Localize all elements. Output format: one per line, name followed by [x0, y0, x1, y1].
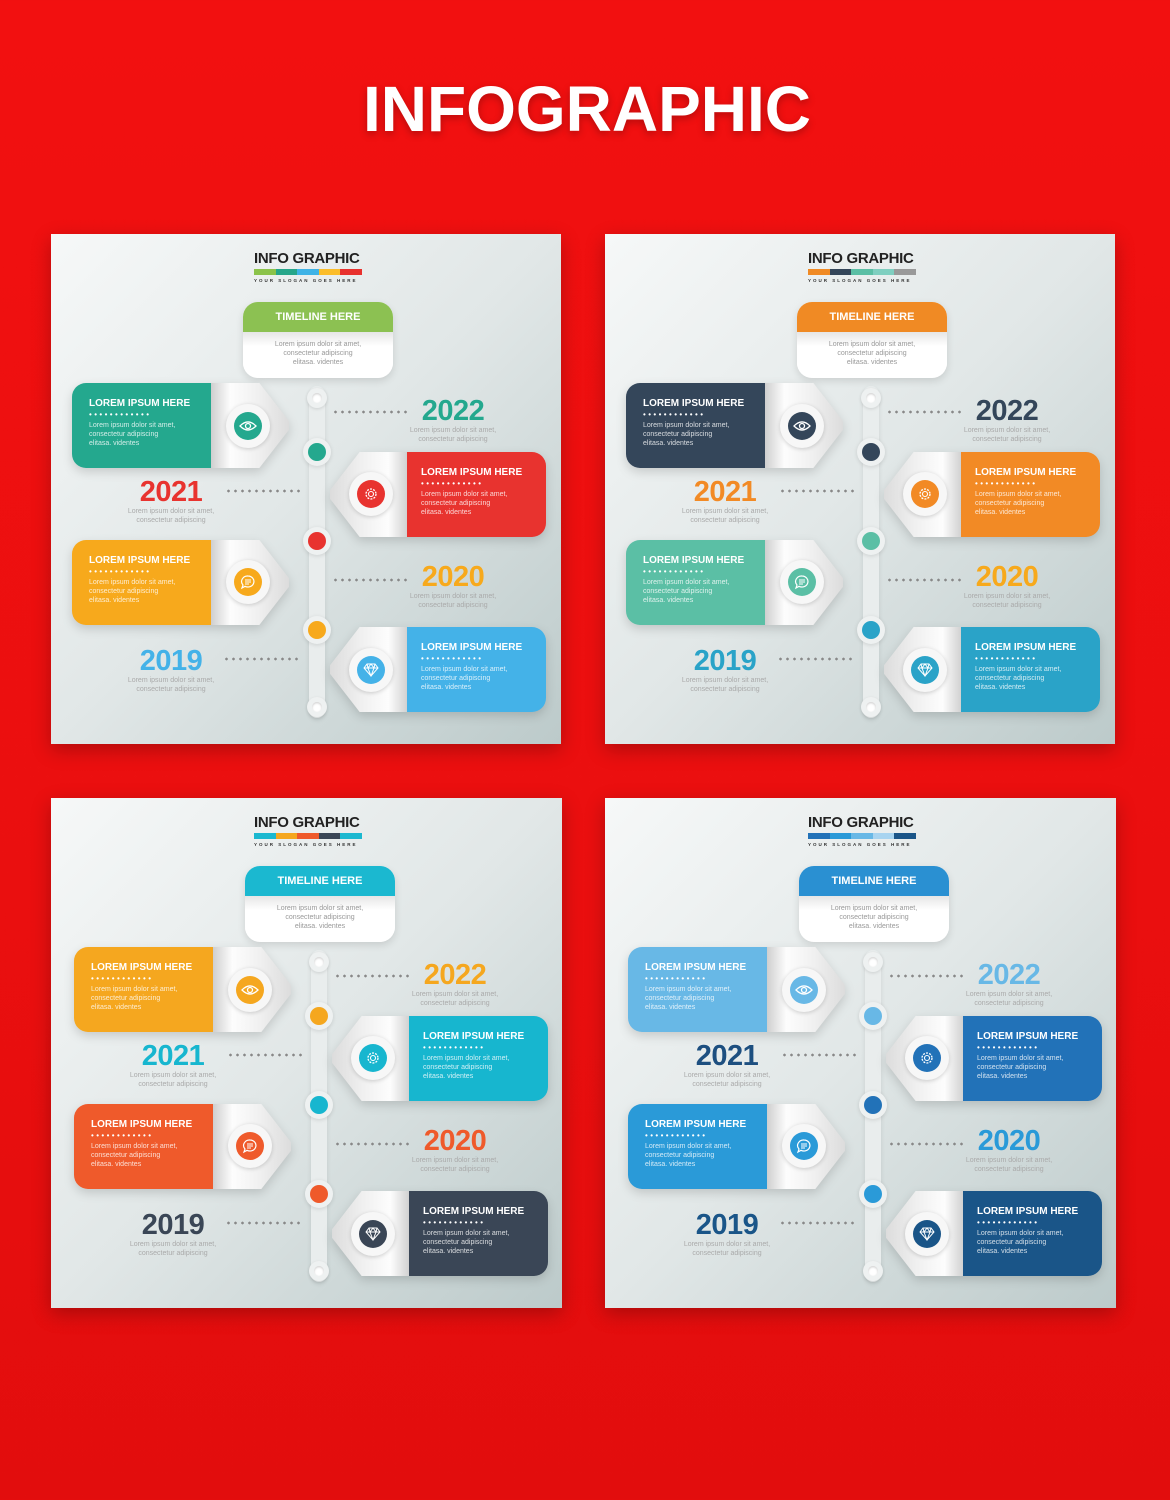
header logo: YOUR SLOGAN GOES HERE	[254, 278, 358, 283]
year 2022: consectetur adipiscing	[974, 1000, 1044, 1007]
card left 1	[70, 947, 294, 1040]
year 2022: consectetur adipiscing	[418, 436, 488, 443]
year 2022: Lorem ipsum dolor sit amet,	[964, 427, 1050, 434]
year 2020: consectetur adipiscing	[418, 602, 488, 609]
node 2	[859, 1091, 887, 1119]
card right 2: LOREM IPSUM HERE	[975, 642, 1076, 653]
year 2021: Lorem ipsum dolor sit amet,	[130, 1072, 216, 1079]
year 2020: consectetur adipiscing	[972, 602, 1042, 609]
node 1	[305, 1002, 333, 1030]
card right 2	[882, 627, 1104, 720]
card left 1: Lorem ipsum dolor sit amet,	[645, 986, 731, 993]
node top	[861, 388, 881, 408]
card left 2: LOREM IPSUM HERE	[89, 555, 190, 566]
dotted connector	[779, 489, 855, 493]
timeline box: TIMELINE HERE	[276, 311, 360, 323]
year 2020: consectetur adipiscing	[974, 1166, 1044, 1173]
card left 1	[624, 947, 848, 1040]
year 2021: consectetur adipiscing	[138, 1081, 208, 1088]
year 2021	[130, 1040, 216, 1088]
year 2020: 2020	[422, 561, 484, 593]
card left 2: consectetur adipiscing	[89, 588, 158, 595]
year 2021: 2021	[142, 1040, 204, 1072]
node 3	[859, 1180, 887, 1208]
card right 1: elitasa. videntes	[421, 509, 471, 516]
year 2019: Lorem ipsum dolor sit amet,	[130, 1241, 216, 1248]
card left 1: consectetur adipiscing	[643, 431, 712, 438]
timeline box: TIMELINE HERE	[278, 875, 362, 887]
card left 1: elitasa. videntes	[645, 1004, 695, 1011]
panel: timeline 1 green	[51, 234, 561, 744]
card left 1: Lorem ipsum dolor sit amet,	[89, 422, 175, 429]
card right 1: elitasa. videntes	[977, 1073, 1027, 1080]
node top	[307, 388, 327, 408]
card right 2: ••••••••••••	[977, 1218, 1039, 1227]
year 2020	[412, 1125, 498, 1173]
card left 2: LOREM IPSUM HERE	[91, 1119, 192, 1130]
node 3	[303, 616, 331, 644]
card left 2: Lorem ipsum dolor sit amet,	[645, 1143, 731, 1150]
node bottom	[863, 1261, 883, 1281]
node 3	[857, 616, 885, 644]
timeline box: elitasa. videntes	[849, 923, 899, 930]
icon gear	[905, 1036, 949, 1080]
dotted connector	[888, 1142, 964, 1146]
year 2019: consectetur adipiscing	[138, 1250, 208, 1257]
timeline box	[799, 866, 949, 942]
timeline box: Lorem ipsum dolor sit amet,	[829, 341, 915, 348]
timeline box: elitasa. videntes	[295, 923, 345, 930]
card left 2: ••••••••••••	[645, 1131, 707, 1140]
year 2019: 2019	[694, 645, 756, 677]
year 2019: consectetur adipiscing	[690, 686, 760, 693]
icon eye	[780, 404, 824, 448]
year 2019	[130, 1209, 216, 1257]
card right 1: elitasa. videntes	[975, 509, 1025, 516]
header logo: YOUR SLOGAN GOES HERE	[808, 842, 912, 847]
dotted connector	[332, 410, 408, 414]
card right 1	[882, 452, 1104, 544]
card left 1: LOREM IPSUM HERE	[91, 962, 192, 973]
icon gear	[349, 472, 393, 516]
year 2019: consectetur adipiscing	[692, 1250, 762, 1257]
card left 1	[622, 383, 846, 476]
year 2019: consectetur adipiscing	[136, 686, 206, 693]
card left 1: ••••••••••••	[645, 974, 707, 983]
icon diamond	[905, 1212, 949, 1256]
card left 2	[70, 1104, 294, 1196]
card right 2: LOREM IPSUM HERE	[421, 642, 522, 653]
card left 1	[68, 383, 292, 476]
icon gear	[351, 1036, 395, 1080]
year 2021: Lorem ipsum dolor sit amet,	[682, 508, 768, 515]
header logo: INFO GRAPHIC	[254, 814, 360, 831]
year 2021: consectetur adipiscing	[692, 1081, 762, 1088]
year 2021: 2021	[140, 476, 202, 508]
timeline box: consectetur adipiscing	[837, 350, 907, 357]
node 2	[857, 527, 885, 555]
card right 1: elitasa. videntes	[423, 1073, 473, 1080]
year 2020: 2020	[978, 1125, 1040, 1157]
dotted connector	[779, 1221, 855, 1225]
card left 2: LOREM IPSUM HERE	[643, 555, 744, 566]
year 2020: Lorem ipsum dolor sit amet,	[966, 1157, 1052, 1164]
year 2021	[682, 476, 768, 524]
card left 2: elitasa. videntes	[91, 1161, 141, 1168]
card right 2: consectetur adipiscing	[975, 675, 1044, 682]
card right 2: Lorem ipsum dolor sit amet,	[975, 666, 1061, 673]
icon gear	[903, 472, 947, 516]
timeline box: consectetur adipiscing	[839, 914, 909, 921]
card left 2: Lorem ipsum dolor sit amet,	[91, 1143, 177, 1150]
card left 2: elitasa. videntes	[645, 1161, 695, 1168]
card right 1: consectetur adipiscing	[975, 500, 1044, 507]
year 2020	[966, 1125, 1052, 1173]
card left 2: consectetur adipiscing	[643, 588, 712, 595]
card left 2	[68, 540, 292, 632]
year 2019	[682, 645, 768, 693]
card right 1: ••••••••••••	[975, 479, 1037, 488]
dotted connector	[332, 578, 408, 582]
dotted connector	[886, 578, 962, 582]
year 2020	[964, 561, 1050, 609]
header logo: INFO GRAPHIC	[808, 814, 914, 831]
card left 1: elitasa. videntes	[89, 440, 139, 447]
card left 1: consectetur adipiscing	[645, 995, 714, 1002]
card right 2	[328, 627, 550, 720]
year 2019	[684, 1209, 770, 1257]
card right 1: LOREM IPSUM HERE	[421, 467, 522, 478]
card left 1: LOREM IPSUM HERE	[643, 398, 744, 409]
year 2020: Lorem ipsum dolor sit amet,	[964, 593, 1050, 600]
year 2019: Lorem ipsum dolor sit amet,	[684, 1241, 770, 1248]
card right 2: Lorem ipsum dolor sit amet,	[421, 666, 507, 673]
icon chat	[782, 1124, 826, 1168]
node 1	[303, 438, 331, 466]
title: INFOGRAPHIC	[363, 73, 811, 145]
card right 2: elitasa. videntes	[975, 684, 1025, 691]
year 2022	[412, 959, 498, 1007]
dotted connector	[227, 1053, 303, 1057]
card right 2: elitasa. videntes	[977, 1248, 1027, 1255]
node bottom	[307, 697, 327, 717]
card left 1: elitasa. videntes	[91, 1004, 141, 1011]
year 2020: consectetur adipiscing	[420, 1166, 490, 1173]
dotted connector	[223, 657, 299, 661]
year 2022: 2022	[978, 959, 1040, 991]
card left 1: ••••••••••••	[91, 974, 153, 983]
card right 2: Lorem ipsum dolor sit amet,	[423, 1230, 509, 1237]
card left 2: elitasa. videntes	[643, 597, 693, 604]
year 2021: Lorem ipsum dolor sit amet,	[128, 508, 214, 515]
card right 2: Lorem ipsum dolor sit amet,	[977, 1230, 1063, 1237]
icon chat	[780, 560, 824, 604]
node bottom	[309, 1261, 329, 1281]
dotted connector	[781, 1053, 857, 1057]
card left 2: Lorem ipsum dolor sit amet,	[89, 579, 175, 586]
icon diamond	[903, 648, 947, 692]
year 2021: Lorem ipsum dolor sit amet,	[684, 1072, 770, 1079]
card right 1	[884, 1016, 1106, 1108]
year 2022: 2022	[422, 395, 484, 427]
node top	[309, 952, 329, 972]
year 2022	[966, 959, 1052, 1007]
header logo	[808, 250, 916, 283]
panel: timeline 4 blue	[605, 798, 1116, 1308]
year 2020: Lorem ipsum dolor sit amet,	[412, 1157, 498, 1164]
timeline box: elitasa. videntes	[847, 359, 897, 366]
year 2021	[684, 1040, 770, 1088]
header logo: YOUR SLOGAN GOES HERE	[808, 278, 912, 283]
card right 1	[330, 1016, 552, 1108]
year 2022	[410, 395, 496, 443]
card left 2: LOREM IPSUM HERE	[645, 1119, 746, 1130]
node 1	[859, 1002, 887, 1030]
node bottom	[861, 697, 881, 717]
header logo: YOUR SLOGAN GOES HERE	[254, 842, 358, 847]
year 2022: 2022	[424, 959, 486, 991]
spine	[863, 386, 879, 718]
card right 2: ••••••••••••	[423, 1218, 485, 1227]
timeline box: TIMELINE HERE	[832, 875, 916, 887]
timeline box	[797, 302, 947, 378]
panel: timeline 3 cyan	[51, 798, 562, 1308]
card left 1: LOREM IPSUM HERE	[89, 398, 190, 409]
card left 2	[622, 540, 846, 632]
card right 1	[328, 452, 550, 544]
dotted connector	[886, 410, 962, 414]
card right 1: Lorem ipsum dolor sit amet,	[977, 1055, 1063, 1062]
card right 2: consectetur adipiscing	[423, 1239, 492, 1246]
timeline box: elitasa. videntes	[293, 359, 343, 366]
year 2019: Lorem ipsum dolor sit amet,	[682, 677, 768, 684]
card left 2: elitasa. videntes	[89, 597, 139, 604]
year 2021: 2021	[696, 1040, 758, 1072]
year 2021: consectetur adipiscing	[690, 517, 760, 524]
card right 2	[330, 1191, 552, 1284]
panel: timeline 2 orange	[605, 234, 1115, 744]
card right 1: Lorem ipsum dolor sit amet,	[421, 491, 507, 498]
header logo: INFO GRAPHIC	[254, 250, 360, 267]
card right 1: consectetur adipiscing	[977, 1064, 1046, 1071]
node 2	[305, 1091, 333, 1119]
card right 2: LOREM IPSUM HERE	[423, 1206, 524, 1217]
card left 2: consectetur adipiscing	[645, 1152, 714, 1159]
icon eye	[782, 968, 826, 1012]
year 2022: Lorem ipsum dolor sit amet,	[966, 991, 1052, 998]
node 3	[305, 1180, 333, 1208]
card right 1: LOREM IPSUM HERE	[423, 1031, 524, 1042]
timeline box: Lorem ipsum dolor sit amet,	[275, 341, 361, 348]
year 2019	[128, 645, 214, 693]
timeline box	[245, 866, 395, 942]
year 2020	[410, 561, 496, 609]
icon chat	[228, 1124, 272, 1168]
card right 1: LOREM IPSUM HERE	[977, 1031, 1078, 1042]
dotted connector	[225, 489, 301, 493]
card right 2	[884, 1191, 1106, 1284]
card left 2: ••••••••••••	[91, 1131, 153, 1140]
card right 1: LOREM IPSUM HERE	[975, 467, 1076, 478]
header logo	[254, 814, 362, 847]
card right 1: Lorem ipsum dolor sit amet,	[423, 1055, 509, 1062]
node 2	[303, 527, 331, 555]
card left 2: consectetur adipiscing	[91, 1152, 160, 1159]
card right 1: consectetur adipiscing	[423, 1064, 492, 1071]
year 2022: consectetur adipiscing	[972, 436, 1042, 443]
header logo	[808, 814, 916, 847]
year 2021	[128, 476, 214, 524]
card left 1: consectetur adipiscing	[91, 995, 160, 1002]
card right 2: elitasa. videntes	[423, 1248, 473, 1255]
card left 2	[624, 1104, 848, 1196]
card right 1: ••••••••••••	[977, 1043, 1039, 1052]
header logo	[254, 250, 362, 283]
card right 1: Lorem ipsum dolor sit amet,	[975, 491, 1061, 498]
card right 1: ••••••••••••	[423, 1043, 485, 1052]
year 2019: Lorem ipsum dolor sit amet,	[128, 677, 214, 684]
year 2022: 2022	[976, 395, 1038, 427]
node 1	[857, 438, 885, 466]
header logo: INFO GRAPHIC	[808, 250, 914, 267]
year 2022: consectetur adipiscing	[420, 1000, 490, 1007]
card right 2: elitasa. videntes	[421, 684, 471, 691]
card right 2: consectetur adipiscing	[977, 1239, 1046, 1246]
year 2019: 2019	[142, 1209, 204, 1241]
year 2020: 2020	[424, 1125, 486, 1157]
timeline box: consectetur adipiscing	[285, 914, 355, 921]
year 2020: 2020	[976, 561, 1038, 593]
card right 2: ••••••••••••	[975, 654, 1037, 663]
dotted connector	[888, 974, 964, 978]
spine	[311, 950, 327, 1282]
card left 1: elitasa. videntes	[643, 440, 693, 447]
icon diamond	[351, 1212, 395, 1256]
icon eye	[228, 968, 272, 1012]
timeline box: consectetur adipiscing	[283, 350, 353, 357]
year 2022: Lorem ipsum dolor sit amet,	[412, 991, 498, 998]
year 2021: 2021	[694, 476, 756, 508]
timeline box: Lorem ipsum dolor sit amet,	[831, 905, 917, 912]
card right 2: LOREM IPSUM HERE	[977, 1206, 1078, 1217]
card left 2: Lorem ipsum dolor sit amet,	[643, 579, 729, 586]
dotted connector	[334, 1142, 410, 1146]
card right 2: consectetur adipiscing	[421, 675, 490, 682]
year 2021: consectetur adipiscing	[136, 517, 206, 524]
card left 1: ••••••••••••	[89, 410, 151, 419]
icon eye	[226, 404, 270, 448]
card left 1: consectetur adipiscing	[89, 431, 158, 438]
timeline box: Lorem ipsum dolor sit amet,	[277, 905, 363, 912]
spine	[309, 386, 325, 718]
card left 1: Lorem ipsum dolor sit amet,	[643, 422, 729, 429]
card right 2: ••••••••••••	[421, 654, 483, 663]
year 2022	[964, 395, 1050, 443]
dotted connector	[225, 1221, 301, 1225]
dotted connector	[777, 657, 853, 661]
card right 1: ••••••••••••	[421, 479, 483, 488]
spine	[865, 950, 881, 1282]
card left 1: Lorem ipsum dolor sit amet,	[91, 986, 177, 993]
node top	[863, 952, 883, 972]
card left 1: LOREM IPSUM HERE	[645, 962, 746, 973]
timeline box: TIMELINE HERE	[830, 311, 914, 323]
year 2019: 2019	[140, 645, 202, 677]
year 2022: Lorem ipsum dolor sit amet,	[410, 427, 496, 434]
icon diamond	[349, 648, 393, 692]
card right 1: consectetur adipiscing	[421, 500, 490, 507]
dotted connector	[334, 974, 410, 978]
card left 2: ••••••••••••	[89, 567, 151, 576]
timeline box	[243, 302, 393, 378]
card left 1: ••••••••••••	[643, 410, 705, 419]
year 2019: 2019	[696, 1209, 758, 1241]
card left 2: ••••••••••••	[643, 567, 705, 576]
icon chat	[226, 560, 270, 604]
year 2020: Lorem ipsum dolor sit amet,	[410, 593, 496, 600]
